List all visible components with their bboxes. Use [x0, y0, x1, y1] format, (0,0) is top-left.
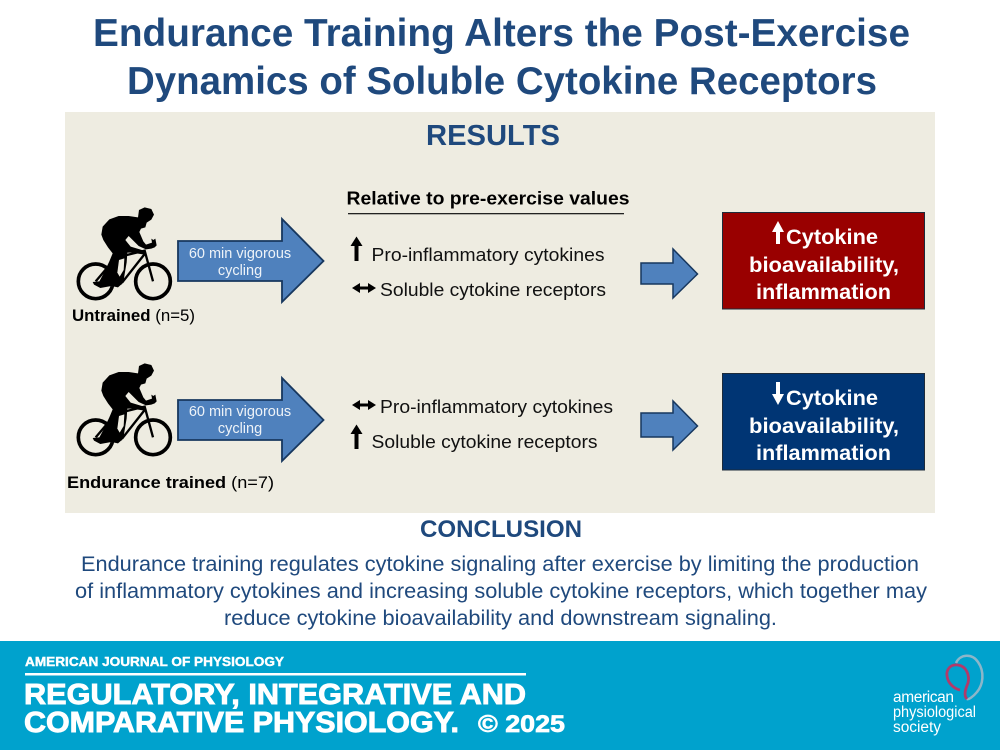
untrained responses: [350, 236, 606, 300]
conclusion text: Endurance training regulates cytokine signaling after exercise by limiting the production: [81, 553, 919, 576]
box: trained outcome: Cytokine: [786, 386, 878, 410]
icon: up arrow: [350, 236, 362, 261]
icon: left-right arrow: [352, 400, 376, 410]
title: Endurance Training Alters the Post-Exercise: [93, 12, 910, 55]
trained responses: [350, 396, 613, 452]
icon: endurance trained cyclist: [78, 363, 170, 455]
box: trained outcome: [722, 374, 924, 470]
footer band: [0, 641, 1000, 750]
logo: american physiological society: [893, 656, 982, 736]
heading: results: RESULTS: [426, 120, 560, 152]
untrained responses: Pro-inflammatory cytokines: [372, 244, 604, 265]
logo: american physiological society: american: [893, 689, 954, 706]
journal name: [24, 655, 565, 739]
icon: up arrow: [350, 424, 362, 449]
label: endurance trained: Endurance trained (n=7): [67, 473, 274, 492]
journal name: REGULATORY, INTEGRATIVE AND: [24, 679, 526, 711]
box: trained outcome: bioavailability,: [749, 414, 899, 438]
conclusion text: [75, 553, 928, 630]
box: untrained outcome: inflammation: [756, 280, 891, 304]
logo: american physiological society: physiological: [893, 704, 976, 721]
logo: american physiological society: society: [893, 719, 941, 736]
arrow: trained cycling: cycling: [218, 421, 262, 437]
arrow: to untrained outcome: [641, 249, 698, 298]
trained responses: Pro-inflammatory cytokines: [380, 396, 613, 417]
journal name: COMPARATIVE PHYSIOLOGY.: [24, 707, 459, 739]
box: untrained outcome: bioavailability,: [749, 253, 899, 277]
panel: results: [65, 112, 935, 513]
box: untrained outcome: Cytokine: [786, 225, 878, 249]
label: untrained: Untrained (n=5): [72, 306, 195, 325]
box: trained outcome: inflammation: [756, 441, 891, 465]
arrow: to trained outcome: [641, 401, 698, 450]
conclusion text: reduce cytokine bioavailability and downstream signaling.: [224, 607, 777, 630]
heading: conclusion: CONCLUSION: [420, 516, 582, 543]
trained responses: Soluble cytokine receptors: [372, 431, 598, 452]
arrow: untrained cycling: 60 min vigorous: [189, 246, 291, 262]
journal name: AMERICAN JOURNAL OF PHYSIOLOGY: [25, 655, 285, 669]
arrow: untrained cycling: [178, 219, 324, 302]
arrow: trained cycling: 60 min vigorous: [189, 404, 291, 420]
title: [93, 12, 910, 103]
arrow: untrained cycling: cycling: [218, 263, 262, 279]
journal name: © 2025: [478, 711, 565, 738]
title: Dynamics of Soluble Cytokine Receptors: [127, 60, 877, 103]
icon: left-right arrow: [352, 283, 376, 293]
conclusion text: of inflammatory cytokines and increasing soluble cytokine receptors, which together may: [75, 580, 928, 603]
icon: untrained cyclist: [78, 207, 170, 299]
box: untrained outcome: [722, 212, 924, 309]
untrained responses: Soluble cytokine receptors: [380, 279, 606, 300]
heading: relative to pre-exercise values: Relative to pre-exercise values: [346, 188, 630, 208]
arrow: trained cycling: [178, 378, 324, 461]
